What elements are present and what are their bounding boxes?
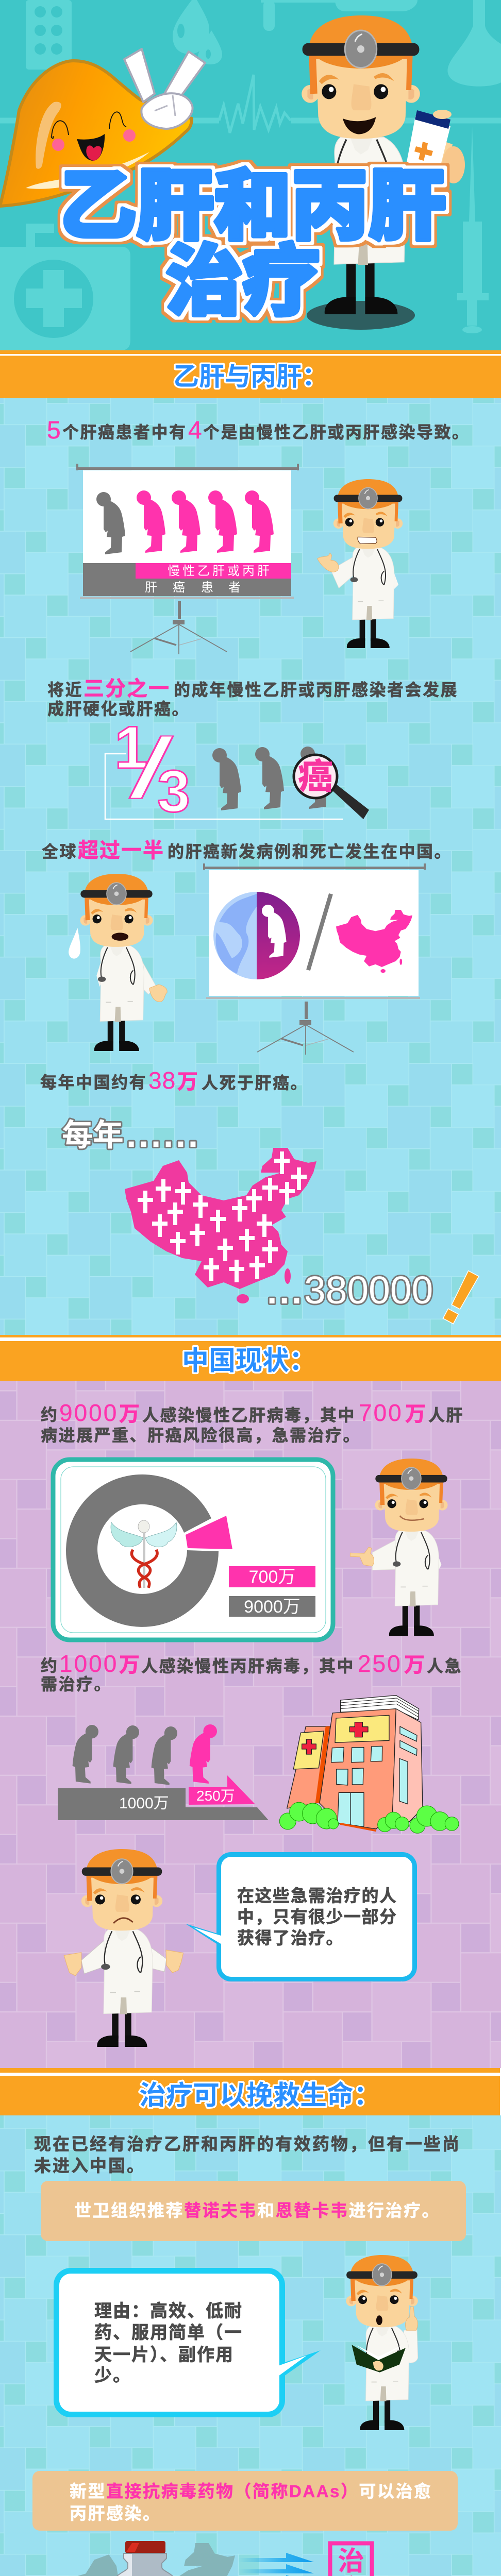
icon: China map with crosses (125, 1148, 316, 1303)
panel: section heading China status: 中国现状： (182, 1346, 316, 1376)
callout: few get treatment: 在这些急需治疗的人 (237, 1886, 397, 1905)
chart: donut ring (66, 1475, 219, 1627)
text: one third statistic: 的成年慢性乙肝或丙肝感染者会发展 (174, 681, 458, 699)
text: 5 in 4 statistic: 4 (188, 417, 203, 444)
icon: pink person (190, 1724, 217, 1784)
panel: section heading treatment saves lives (0, 2068, 500, 2115)
icon: medical kit watermark (0, 224, 130, 350)
text: hepatitis C statistic: 250 (358, 1650, 402, 1677)
icon: water drops watermark (173, 0, 222, 64)
callout: WHO recommendation: 世卫组织推荐替诺夫韦和恩替卡韦进行治疗。 (74, 2201, 440, 2220)
chart: pink slice (186, 1516, 232, 1549)
chart: projector screen world and China (203, 863, 426, 1055)
text: hepatitis C statistic: 人感染慢性丙肝病毒，其中 (141, 1657, 355, 1675)
callout: few get treatment (186, 1855, 414, 1979)
divider slash between globe and map (308, 894, 331, 970)
text: annual deaths statistic: 人死于肝癌。 (202, 1074, 308, 1092)
icon: grimacing doctor (318, 479, 403, 648)
callout: few get treatment: 中，只有很少一部分 (237, 1907, 397, 1926)
icon: DAAs bottle (112, 2541, 179, 2576)
icon: syringe watermark (457, 126, 489, 333)
icon: gray people (73, 1725, 177, 1785)
chart: projector screen with patients: 者 (228, 581, 241, 595)
icon: victory hand (124, 49, 205, 129)
text: hepatitis B statistic: 700 (359, 1399, 403, 1426)
title: 乙肝和丙肝 (59, 163, 446, 249)
text: each year: 每年 (62, 1118, 124, 1153)
callout: reasons (57, 2271, 321, 2414)
panel: hepatitis background section (0, 398, 501, 1342)
icon: hospital (279, 1696, 459, 1833)
callout: cure hepatitis C vertical label (330, 2543, 372, 2576)
icon: three gray patients (212, 747, 329, 810)
chart: projector screen with patients: 肝 (145, 581, 157, 595)
text: annual deaths statistic: 38 (148, 1067, 176, 1094)
text: one third statistic: 三分之一 (84, 677, 170, 700)
text: annual deaths statistic: 万 (177, 1071, 199, 1093)
callout: DAAs statement: 新型直接抗病毒药物（简称DAAs）可以治愈 (70, 2482, 432, 2501)
icon: magnifier with cancer character: 癌 (298, 757, 333, 796)
text: one third statistic line 2: 成肝硬化或肝癌。 (47, 700, 190, 718)
chart: one third fraction: 3 (157, 758, 190, 824)
icon: China map gray (59, 2543, 235, 2576)
panel: China status section (0, 1381, 501, 2068)
callout: reasons: 药、服用简单（一 (94, 2323, 243, 2343)
panel: section heading hepatitis B and C: 乙肝与丙肝： (173, 362, 328, 391)
text: 380000: 380000 (304, 1268, 433, 1312)
text: hepatitis B statistic: 万 (405, 1403, 427, 1426)
text: hepatitis B statistic: 9000 (59, 1399, 118, 1426)
panel: section heading treatment saves lives: 治疗可以挽救生命： (139, 2081, 380, 2111)
icon: exclamation mark: ! (429, 1253, 493, 1342)
icon: doctor with medicine bottle (302, 15, 465, 330)
icon: flask watermark (447, 0, 501, 87)
icon: magnifier with cancer character (294, 755, 369, 819)
text: hepatitis C statistic: 1000 (59, 1650, 118, 1677)
panel: section heading hepatitis B and C (0, 350, 501, 398)
text: global share statistic: 全球 (42, 842, 77, 861)
callout: DAAs statement (32, 2471, 458, 2531)
callout: reasons: 理由：高效、低耐 (94, 2301, 243, 2321)
icon: gray patient (96, 492, 125, 554)
chart: one third fraction: 1 (114, 714, 148, 781)
chart: one third fraction (105, 714, 343, 824)
callout: reasons: 少。 (94, 2366, 131, 2385)
bar: 1000 wan: 1000万 (119, 1795, 169, 1812)
text: hepatitis C statistic: 万 (119, 1654, 141, 1676)
text: 380000: ... (267, 1271, 304, 1311)
chart: projector screen with patients: 慢性乙肝或丙肝 (168, 564, 272, 578)
icon: China map pink (336, 910, 412, 973)
panel: section heading China status (0, 1335, 501, 1381)
text: global share statistic: 超过一半 (78, 839, 164, 862)
callout: reasons: 天一片）、副作用 (94, 2345, 234, 2365)
legend: 700 wan (229, 1566, 315, 1587)
panel: header banner (0, 0, 501, 350)
title (59, 163, 446, 325)
text: one third statistic: 将近 (47, 681, 83, 699)
icon: doctor with book (346, 2255, 418, 2430)
icon: caduceus (111, 1520, 177, 1588)
text: hepatitis B statistic: 人感染慢性乙肝病毒，其中 (142, 1406, 356, 1425)
text: hepatitis C statistic: 约 (41, 1656, 59, 1675)
text: global share statistic: 的肝癌新发病例和死亡发生在中国。 (168, 842, 452, 861)
text: each year: ...... (126, 1114, 201, 1155)
chart: projector screen with patients: 癌 (173, 581, 185, 595)
legend: 9000 wan: 9000万 (244, 1597, 300, 1617)
arrows: eight blue arrows (238, 2553, 314, 2576)
icon: pill card watermark (26, 0, 72, 70)
chart: projector screen with patients (76, 464, 299, 654)
bar: 1000 wan (58, 1788, 269, 1820)
text: hepatitis C statistic: 人急 (427, 1657, 462, 1675)
text: effective drugs intro line 2: 未进入中国。 (34, 2156, 145, 2175)
chart: one third fraction: / (129, 721, 174, 816)
legend: 700 wan: 700万 (249, 1567, 295, 1587)
arrow: 250 wan (189, 1775, 255, 1805)
arrow: 250 wan: 250万 (196, 1788, 235, 1804)
legend: 9000 wan (229, 1596, 315, 1617)
icon: worried doctor (69, 874, 167, 1051)
chart: projector screen with patients: 患 (201, 581, 213, 595)
chart: donut card (53, 1460, 333, 1640)
text: hepatitis B statistic: 万 (119, 1403, 141, 1426)
icon: liver mascot (0, 49, 205, 206)
callout: few get treatment: 获得了治疗。 (237, 1928, 344, 1947)
text: effective drugs intro: 现在已经有治疗乙肝和丙肝的有效药物，但有一些尚 (34, 2134, 461, 2154)
callout: DAAs statement: 丙肝感染。 (70, 2504, 161, 2523)
text: annual deaths statistic: 每年中国约有 (40, 1073, 147, 1092)
icon: pink patients (137, 490, 274, 553)
icon: tool watermark (261, 0, 417, 31)
text: 5 in 4 statistic: 个是由慢性乙肝或丙肝感染导致。 (203, 423, 470, 442)
text: hepatitis B statistic: 人肝 (428, 1406, 464, 1425)
chart: people bar (58, 1724, 269, 1820)
text: hepatitis B statistic line 2: 病进展严重、肝癌风险很高，急需治疗。 (41, 1426, 361, 1445)
panel: treatment section (0, 2115, 501, 2576)
icon: pointing doctor (350, 1459, 448, 1636)
icon: shrugging doctor (64, 1849, 183, 2047)
icon: heartbeat line (0, 75, 501, 133)
callout: WHO recommendation (41, 2181, 466, 2241)
icon: medicine bottle (406, 110, 465, 183)
text: hepatitis B statistic: 约 (41, 1405, 59, 1424)
text: 5 in 4 statistic: 5 (47, 417, 62, 444)
title: 治疗 (165, 238, 320, 325)
text: 5 in 4 statistic: 个肝癌患者中有 (62, 423, 187, 442)
text: hepatitis C statistic: 万 (404, 1654, 426, 1676)
callout: cure hepatitis C vertical label: 治 (338, 2547, 364, 2576)
text: hepatitis C statistic line 2: 需治疗。 (41, 1675, 112, 1693)
icon: globe half purple (213, 892, 300, 979)
